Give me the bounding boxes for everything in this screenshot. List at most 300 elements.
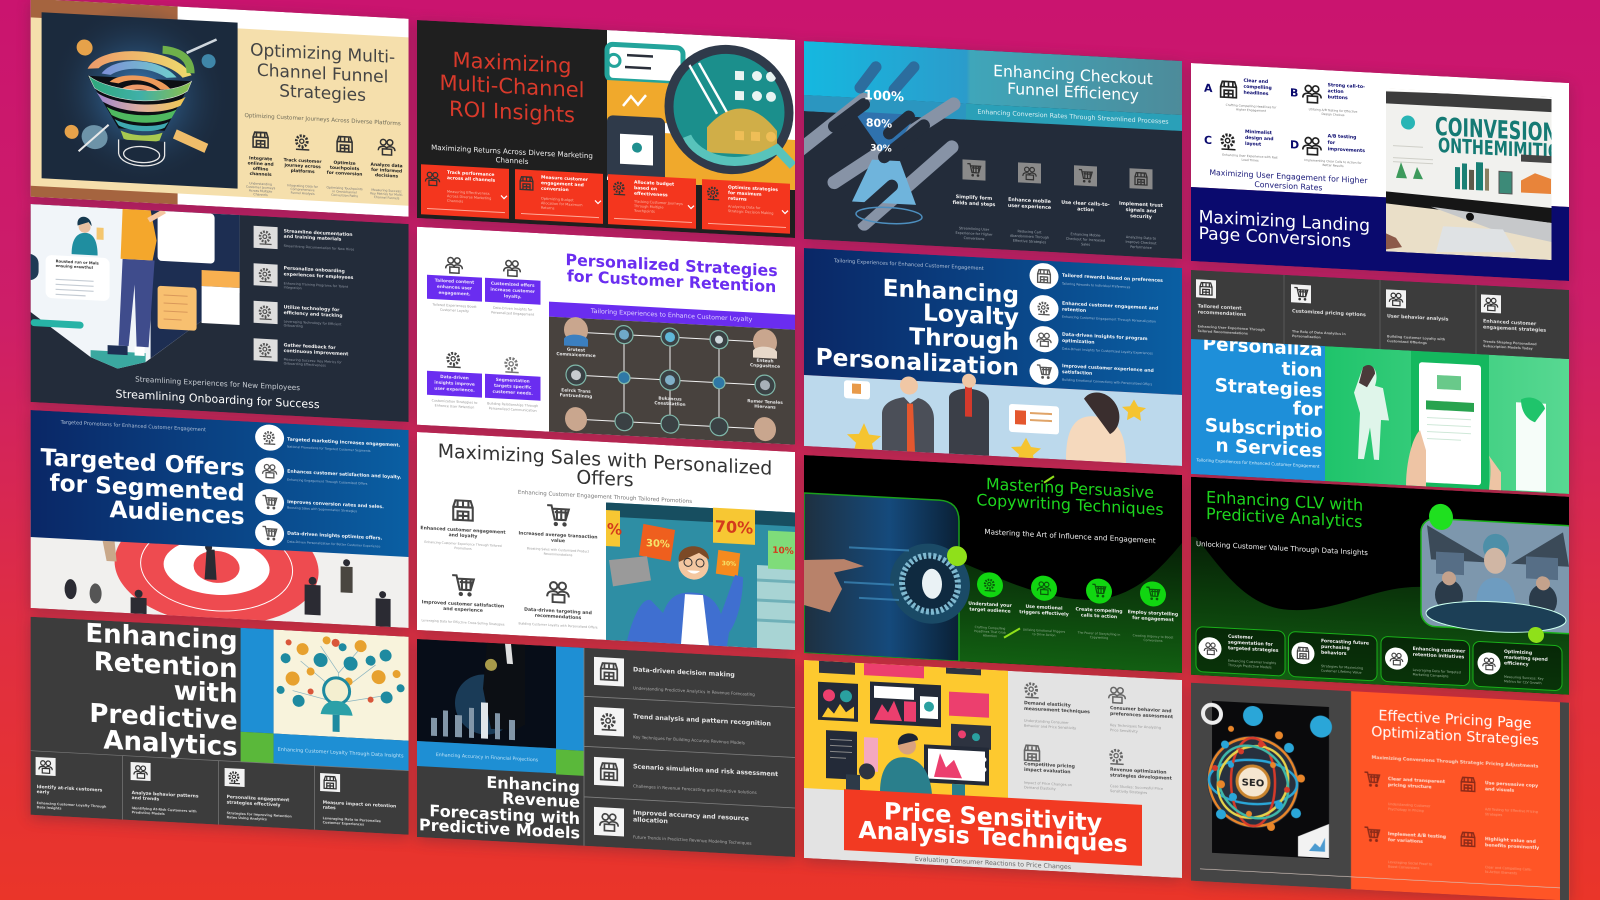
assessment notes: Understanding Consumer (1024, 719, 1069, 725)
technique steps: triggers effectively (1019, 609, 1069, 618)
title: Strategies (279, 81, 366, 106)
optimization tactics (1364, 772, 1539, 877)
title: Mastering Persuasive (986, 474, 1154, 502)
features row: Integrating Data for (287, 183, 319, 189)
network photo: Eelrck Trans (561, 387, 591, 395)
feature columns: Tailored content (1198, 303, 1242, 312)
option C: design and (1245, 135, 1274, 142)
panel: Optimizing Multi-Channel Funnel Strategies (31, 0, 409, 217)
title: with (174, 676, 238, 710)
title: for Customer Retention (567, 266, 776, 296)
strategy cards: purchasing (1321, 644, 1350, 651)
forecasting rows: Improved accuracy and resource (633, 809, 749, 823)
action columns: Leveraging Data to Personalize (323, 816, 382, 823)
action columns: rates (323, 805, 336, 811)
title: Channel Funnel (257, 61, 388, 88)
feature columns: Building Customer Loyalty with (1387, 334, 1446, 341)
funnel illustration with capsules (799, 61, 954, 229)
benefit cards: Customization Strategies to (432, 398, 477, 405)
feature descriptions: Checkout for Increased (1066, 237, 1105, 243)
benefits list: Improved customer experience and (1062, 363, 1154, 374)
assessment notes: Key Techniques for Analyzing (1110, 723, 1161, 730)
feature columns: The Role of Data Analytics in (1292, 329, 1346, 336)
store photo: 10% (772, 546, 794, 557)
lime accents (1429, 503, 1544, 643)
card: track performance: Measuring Effectiveness (447, 190, 490, 196)
green wave (958, 531, 1182, 673)
feature columns: Trends Shaping Personalized (1483, 339, 1537, 346)
feature columns (1191, 270, 1569, 359)
optimization tactics: Clear and transparent (1388, 776, 1446, 785)
onboarding steps: continuous improvement (284, 348, 349, 357)
feature descriptions: Improve Checkout (1126, 240, 1157, 245)
subtitle: Enhancing Conversion Rates Through Streamlined Processes (977, 109, 1169, 126)
technique steps: Creating Urgency to Boost (1133, 633, 1174, 640)
subtitle: Unlocking Customer Value Through Data Insights (1196, 540, 1368, 557)
feature labels: Simplify form (956, 194, 992, 202)
title banner: Analysis Techniques (858, 816, 1128, 858)
technique steps: Use emotional (1025, 604, 1063, 612)
features row: Track customer (284, 157, 322, 165)
features row: for conversion (327, 170, 362, 178)
features row: touchpoints (330, 165, 360, 172)
option D: D (1290, 138, 1299, 152)
title: Forecasting with (429, 801, 580, 828)
network photo: Funtrunlinmg (560, 392, 592, 400)
title: Predictive Models (419, 815, 580, 843)
features row: channels (250, 171, 272, 178)
feature columns: Personalization (1292, 334, 1321, 339)
offer benefits: Leveraging Data for Effective Cross-Selling Strategies (422, 618, 505, 627)
action columns: Analyze behavior patterns (132, 790, 199, 800)
onboarding steps: Enhancing Training Programs for Talent (284, 281, 349, 289)
assessment notes: Case Studies: Successful Price (1110, 784, 1163, 791)
forecasting rows (584, 648, 795, 857)
onboarding steps: Onboarding Effectiveness (284, 361, 326, 368)
feature columns: engagement strategies (1483, 324, 1546, 334)
offer benefits: Data-driven targeting and (524, 607, 592, 616)
benefit cards: Customized offers (491, 281, 535, 289)
benefit cards: Data-Driven Insights for (493, 306, 533, 312)
title: Streamlining Onboarding for Success (116, 388, 320, 411)
title: Enhancing CLV with (1206, 488, 1363, 515)
benefit cards: user experience. (434, 386, 475, 394)
green phone illustration (1325, 346, 1569, 494)
benefits list: Tailoring Rewards to Individual Preferences (1061, 282, 1131, 289)
network photo: Constitatlion (654, 400, 686, 408)
technique steps: Copywriting (1090, 635, 1108, 640)
forecasting rows: Scenario simulation and risk assessment (633, 763, 778, 778)
strategy cards: Enhancing Customer Insights (1228, 659, 1277, 665)
strategy cards: targeted strategies (1228, 645, 1279, 654)
technique steps: Conversions (1144, 638, 1163, 643)
features row: Across Multiple (249, 188, 272, 194)
action columns: Enhancing Customer Loyalty Through (37, 801, 107, 809)
offer benefits: and loyalty (449, 532, 477, 540)
network photo: Hiervans (754, 404, 776, 411)
title: Predictive Analytics (1206, 504, 1362, 531)
panel: Enhancing Loyalty Through Personalization (804, 248, 1182, 473)
benefits list: Targeted marketing increases engagement. (287, 437, 401, 449)
blue tagline strip: Enhancing Customer Loyalty Through Data Insights (278, 747, 404, 759)
forecasting rows: Future Trends in Predictive Revenue Modeling Techniques (633, 834, 752, 846)
strategy cards: retention initiatives (1413, 652, 1464, 660)
store photo: 70% (715, 517, 753, 538)
network photo: Bukancus (658, 395, 682, 403)
subtitle: Maximizing User Engagement for Higher (1209, 168, 1368, 185)
feature labels: security (1130, 213, 1153, 220)
blue title block: n Services (1216, 435, 1323, 462)
benefits list: optimization (1062, 338, 1095, 346)
benefits list: Enhancing Customer Engagement Through Personalization (1062, 315, 1156, 324)
assessment notes: strategies development (1110, 772, 1173, 782)
features row: platforms (291, 168, 315, 175)
technique steps: to Drive Action (1033, 632, 1056, 637)
forecasting rows: Data-driven decision making (633, 666, 735, 679)
option D: A/B testing (1328, 133, 1356, 141)
benefit cards: Tailored Experiences Boost (431, 302, 477, 309)
title: Maximizing (453, 47, 571, 78)
AI hand image (804, 493, 970, 662)
onboarding steps: Utilize technology for (284, 304, 340, 313)
funnel illustration (42, 0, 238, 190)
strategy cards: Enhancing customer (1413, 646, 1466, 655)
eyebrow: Targeted Promotions for Enhanced Customer Engagement (60, 420, 206, 433)
title: Funnel Efficiency (1007, 80, 1139, 105)
title: Effective Pricing Page (1379, 708, 1531, 732)
SEO network image (1203, 700, 1332, 859)
magnifier illustration (607, 30, 795, 190)
network photo: Cnpgusitnce (750, 362, 780, 370)
features row: Understanding (249, 181, 272, 186)
offer benefits: Improved customer satisfaction (422, 599, 504, 610)
benefit cards: loyalty. (504, 293, 522, 300)
assessment notes: Demand Elasticity (1024, 785, 1056, 791)
title: Multi-Channel (439, 70, 585, 102)
card: track performance (421, 164, 509, 219)
feature columns: Enhancing User Experience Through (1198, 324, 1266, 332)
network photo: Commaicemmce (556, 351, 596, 359)
features row: online and (248, 160, 274, 168)
onboarding steps: and training materials (284, 234, 342, 243)
title: Maximizing Landing (1199, 207, 1370, 236)
card: optimize strategies: for maximum (728, 190, 762, 198)
assessment notes: Consumer behavior and (1110, 705, 1172, 714)
onboarding steps: Gather feedback for (284, 342, 336, 351)
card: allocate budget: Through Multiple (633, 204, 664, 210)
option A (1204, 78, 1276, 112)
strategy cards: Leveraging Data for Targeted (1413, 668, 1461, 674)
forecasting rows: Challenges in Revenue Forecasting and Predictive Solutions (633, 783, 757, 795)
option C (1204, 130, 1278, 162)
assessment notes: Revenue optimization (1110, 767, 1167, 776)
title: Optimizing Multi- (250, 40, 395, 68)
panel: Maximizing Landing Page Conversions (1191, 63, 1569, 281)
feature labels: signals and (1126, 207, 1157, 215)
option B: Strong call-to- (1328, 82, 1365, 90)
benefit cards: Building Relationships Through (487, 401, 538, 408)
benefits list: Enhanced customer engagement and (1062, 301, 1158, 312)
option D (1291, 134, 1365, 168)
option C: Load Times (1241, 158, 1259, 163)
store photo: 30% (646, 538, 670, 550)
subtitle: Channels (496, 155, 529, 166)
offer benefits: and experience (443, 606, 483, 614)
technique steps: for engagement (1132, 615, 1175, 623)
optimization tactics: for variations (1388, 837, 1423, 845)
optimization tactics: Boost Conversions (1388, 865, 1420, 870)
business people illustration (804, 365, 1182, 473)
benefits list: Data-driven insights for program (1062, 332, 1148, 342)
benefit cards (427, 256, 540, 413)
title banner: Price Sensitivity (884, 797, 1103, 837)
assessment notes: Sensitivity Strategies (1110, 789, 1147, 795)
feature descriptions: Performance (1130, 245, 1152, 250)
action columns: early (37, 789, 49, 796)
optimization tactics: Clear and Compelling Calls- (1485, 865, 1533, 872)
optimization tactics: A/B Testing for Effective Pricing (1485, 807, 1538, 814)
technique steps: Headlines That Grab (974, 629, 1006, 635)
card: track performance: Track performance (447, 170, 494, 178)
option D: Implementing Clear Calls to Action for (1304, 158, 1362, 165)
offer benefits: Enhanced customer engagement (420, 525, 506, 536)
technique steps (968, 571, 1178, 648)
benefits list: Building Emotional Connections with Personalized Offers (1062, 378, 1152, 386)
option A: compelling (1244, 84, 1272, 91)
card: track performance: Across Diverse Marketing (447, 194, 491, 201)
offer benefits: Recommendations (544, 552, 573, 557)
people and documents illustration: ensuing erawthul (56, 263, 93, 270)
feature columns: Customized Offerings (1387, 339, 1427, 345)
card: allocate budget: Touchpoints (633, 209, 655, 214)
band: Tailoring Experiences to Enhance Customer Loyalty (590, 308, 753, 323)
people and documents illustration (21, 203, 240, 375)
feature descriptions: Enhancing Mobile (1071, 232, 1100, 238)
option B: Utilizing A/B Testing for Effective (1309, 107, 1358, 114)
benefit cards: Segmentation (496, 377, 530, 385)
onboarding steps: Personalize onboarding (284, 265, 345, 275)
title: for Segmented (49, 470, 245, 507)
title: Optimization Strategies (1371, 724, 1539, 749)
lime accents (947, 471, 1150, 645)
subtitle: Maximizing Conversions Through Strategic Pricing Adjustments (1372, 755, 1539, 770)
title: Analytics (103, 726, 238, 763)
benefits list: Tailored rewards based on preferences (1062, 273, 1163, 284)
target photo (31, 499, 409, 635)
optimization tactics: Highlight value and (1485, 836, 1536, 845)
panel: Enhancing Checkout Funnel Efficiency (799, 41, 1182, 259)
action columns: Customer Experiences (323, 820, 364, 827)
strategy cards: Through Predictive Models (1227, 663, 1272, 669)
features row: for informed (371, 167, 402, 175)
blue title block: Personaliza (1203, 334, 1322, 361)
panel: Targeted Offers for Segmented Audiences (31, 410, 409, 635)
title: Offers (576, 466, 634, 491)
features row: Conversion Paths (331, 193, 358, 198)
strategy cards: Measuring Success: Key (1504, 675, 1544, 681)
benefit cards: Personalized Engagement (491, 310, 535, 317)
benefits list: National Promotions for Targeted Customer Segments (287, 445, 371, 453)
offer benefits: Building Customer Loyalty with Personalized Offers (518, 621, 598, 630)
benefit cards: Personalized Communication (489, 406, 537, 413)
offer benefits: value (551, 538, 565, 544)
card: allocate budget: based on (634, 185, 657, 192)
feature descriptions: Sales (1081, 242, 1090, 247)
strategy cards: Customer (1228, 634, 1254, 641)
features row: Optimize (334, 160, 356, 167)
feature descriptions: Effective Strategies (1013, 239, 1046, 244)
strategy cards: Marketing Campaigns (1413, 672, 1449, 678)
optimization tactics: Leveraging Social Proof to (1388, 860, 1432, 866)
onboarding steps: Onboarding (284, 323, 303, 328)
offer benefits: Enhancing Customer Experience Through Tailored (424, 540, 502, 548)
features row: Analyze data (371, 162, 403, 169)
features row: journey across (283, 162, 321, 170)
option C: Minimalist (1245, 129, 1273, 136)
title: Predictive (89, 699, 238, 737)
onboarding steps (254, 226, 355, 369)
card: track performance: across all channels (447, 175, 496, 184)
option C: C (1204, 134, 1212, 147)
features row: Integrate (249, 155, 272, 162)
assessment notes: Demand elasticity (1024, 700, 1071, 709)
feature columns: Subscription Models Today (1483, 344, 1533, 351)
benefit cards: customer needs. (493, 389, 533, 397)
band (549, 302, 795, 330)
option C: layout (1245, 141, 1262, 148)
optimization tactics: to-Action Elements (1485, 870, 1517, 875)
panel: Maximizing Multi-Channel ROI Insights (417, 20, 795, 238)
assessment notes: Competitive pricing (1024, 761, 1075, 770)
title: Loyalty (923, 299, 1019, 331)
people and documents illustration: Rousted run or Mals (56, 258, 100, 266)
benefit cards: Tailored content (435, 278, 474, 286)
panel: Enhancing Revenue Forecasting with Predictive Models (417, 639, 795, 857)
offer benefits: Boosting Sales with Customized Product (527, 546, 590, 554)
onboarding steps: Leveraging Technology for Efficient (284, 319, 342, 326)
network photo: Enteuh (756, 358, 774, 365)
option A: Crafting Compelling Headlines for (1226, 103, 1277, 110)
strategy cards: segmentation for (1228, 639, 1274, 648)
benefits list: Data-Driven Personalization for Better Customer Experience (287, 540, 380, 549)
benefit cards: Enhance User Retention (435, 403, 474, 410)
monitor photo (1386, 88, 1560, 261)
strategy cards: efficiency (1504, 660, 1529, 668)
features row: Customer Journeys (246, 185, 276, 190)
SEO network image: SEO (1242, 777, 1264, 790)
feature descriptions: Conversions (964, 236, 985, 241)
card: measure customer engagement: Measure customer (541, 175, 589, 183)
subtitle: Enhancing Customer Engagement Through Tailored Promotions (518, 490, 692, 505)
benefit cards: increase customer (490, 287, 536, 295)
title: Personalization (816, 344, 1019, 381)
assessment notes: Behavior and Price Sensitivity (1024, 724, 1076, 730)
offer benefits: recommendations (535, 613, 582, 621)
strategy cards (1196, 626, 1562, 691)
feature columns: Tailored Recommendations (1198, 329, 1248, 336)
action columns: Predictive Models (132, 810, 165, 816)
panel: Maximizing Sales with Personalized Offers (417, 432, 795, 650)
option A: Clear and (1244, 78, 1268, 85)
card: optimize strategies: Analyzing Data for (728, 204, 761, 210)
option C: Enhancing User Experience with Fast (1222, 153, 1279, 160)
title: Targeted Offers (41, 444, 245, 482)
action columns (31, 751, 409, 835)
store photo (606, 502, 795, 650)
card: allocate budget: Tracking Customer Journeys (633, 199, 683, 206)
title: Through (909, 323, 1019, 356)
title: Enhancing Checkout (993, 62, 1153, 88)
onboarding steps: efficiency and tracking (284, 310, 343, 319)
technique steps: Understand your (968, 601, 1012, 609)
card: optimize strategies: returns (728, 196, 747, 203)
offer benefits: Increased average transaction (518, 530, 598, 541)
features row: in Omnichannel (332, 189, 357, 195)
technique steps: Create compelling (1075, 606, 1123, 615)
forecasting rows: Understanding Predictive Analytics in Revenue Forecasting (633, 685, 755, 697)
option D: Better Results (1322, 163, 1344, 168)
option B: Design Choices (1321, 112, 1345, 117)
optimization tactics: Understanding Customer (1388, 802, 1431, 808)
blue title block: tion (1282, 359, 1322, 382)
benefits list: Data-Driven Insights for Customized Loyalty Experiences (1062, 347, 1153, 355)
assessment notes: Impact of Price Changes on (1024, 781, 1072, 787)
blue tagline strip (241, 732, 409, 771)
benefits list (255, 424, 402, 553)
action columns: and trends (132, 795, 159, 803)
title: ROI Insights (449, 96, 575, 127)
subtitle: Maximizing Returns Across Diverse Marketing (431, 143, 593, 160)
card: optimize strategies: Optimize strategies (728, 184, 778, 193)
technique steps: Attention (983, 633, 997, 638)
card: allocate budget: effectiveness (634, 191, 668, 198)
subtitle: Optimizing Customer Journeys Across Diverse Platforms (244, 113, 401, 127)
subtitle: Evaluating Consumer Reactions to Price Changes (915, 856, 1071, 871)
panel: Personalized Strategies for Customer Retention (417, 227, 795, 445)
benefits list (1030, 262, 1163, 391)
features row: Measuring Success: (371, 188, 402, 193)
strategy cards: Strategies for Maximizing (1321, 664, 1363, 670)
feature descriptions: Experience for Higher (956, 231, 993, 237)
feature labels: action (1077, 206, 1094, 213)
forecasting rows: Key Techniques for Building Accurate Revenue Models (633, 734, 745, 745)
strategy cards: Optimizing (1504, 649, 1532, 656)
title: Personalized Strategies (566, 250, 778, 280)
card: allocate budget (608, 174, 696, 229)
option D: for (1328, 140, 1336, 146)
panel: Price Sensitivity Analysis Techniques (804, 660, 1182, 878)
strategy cards: Metrics for CLV Growth (1504, 679, 1542, 685)
technique steps: calls to action (1081, 612, 1117, 620)
action columns: Identify at-risk customers (37, 784, 103, 794)
option B: B (1290, 86, 1298, 100)
action columns: Strategies for Improving Retention (227, 811, 292, 819)
onboarding steps: experiences for employees (284, 271, 354, 281)
card: measure customer engagement: engagement and (541, 180, 584, 188)
benefits list: Data-driven insights optimize offers. (287, 531, 383, 542)
title: Audiences (110, 496, 245, 530)
feature descriptions: Reducing Cart (1018, 229, 1042, 235)
benefits list: Enhancing Engagement Through Customized Offers (287, 478, 368, 486)
store photo: 30% (722, 560, 736, 568)
card: measure customer engagement: Optimizing Budget (541, 197, 574, 202)
AI team photo (1421, 518, 1581, 636)
blue title block (1191, 330, 1325, 481)
feature columns: Customized pricing options (1292, 308, 1366, 318)
strategy cards: marketing spend (1504, 655, 1548, 663)
features row (246, 132, 403, 204)
benefit cards: engagement. (438, 290, 471, 298)
